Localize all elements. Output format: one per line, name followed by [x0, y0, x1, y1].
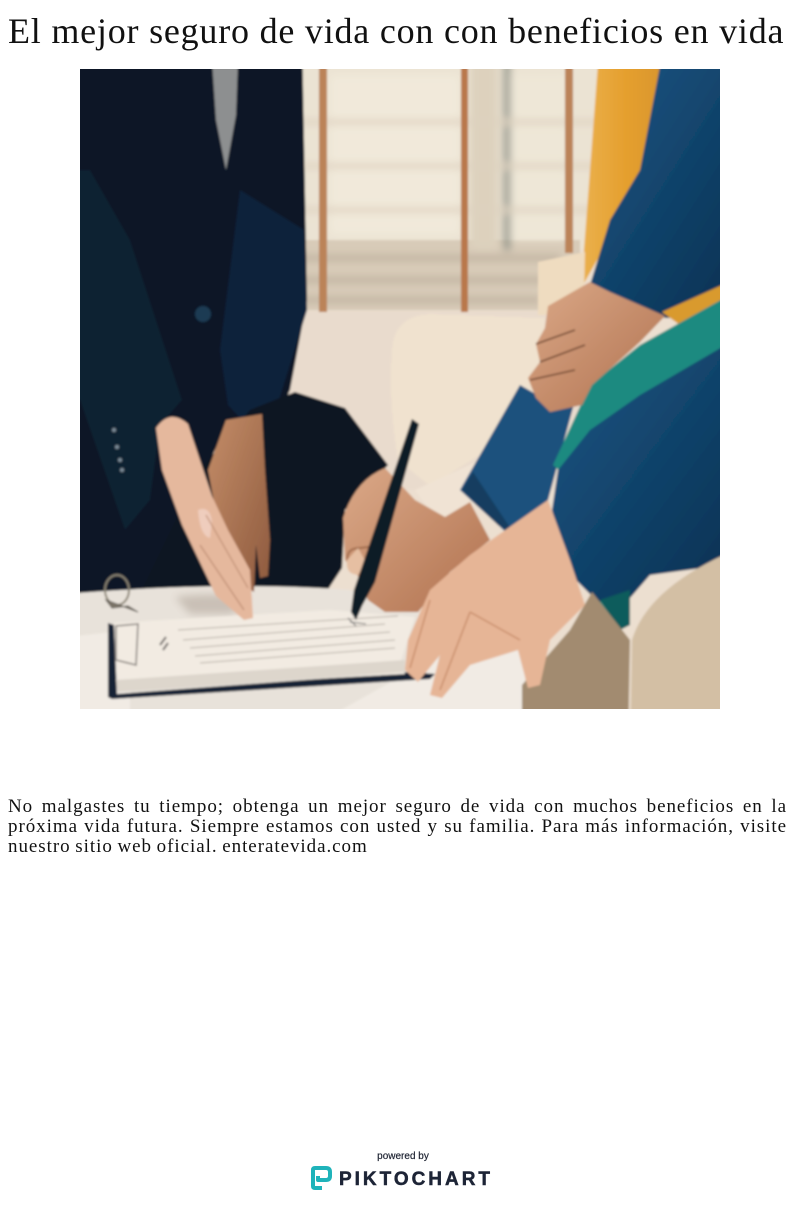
trousers of the client — [522, 540, 760, 750]
foreground hand — [405, 500, 585, 698]
body text: nuestro sitio web oficial. enteratevida.com — [8, 836, 368, 857]
blue sweater arm — [460, 50, 760, 536]
blind cords — [319, 60, 573, 312]
piktochart logo — [311, 1151, 490, 1190]
photo: signing an insurance document — [80, 69, 720, 709]
suit jacket — [40, 30, 307, 600]
body text: No malgastes tu tiempo; obtenga un mejor seguro de vida con muchos beneficios en la — [8, 796, 787, 817]
title: El mejor seguro de vida con con beneficios en vida — [8, 11, 784, 51]
icon: piktochart mark — [313, 1168, 330, 1188]
curtain — [583, 50, 665, 285]
window blinds — [302, 60, 600, 300]
clipboard and document — [105, 575, 435, 699]
body text — [8, 796, 787, 857]
table — [40, 586, 525, 750]
body text: próxima vida futura. Siempre estamos con usted y su familia. Para más información, visite — [8, 816, 787, 837]
writing hand with pen — [343, 419, 490, 620]
hands of the advisor — [156, 414, 270, 620]
right blue sleeve — [552, 325, 760, 630]
hand on arm — [528, 282, 665, 412]
green garment — [553, 278, 760, 630]
powered by caption: powered by — [377, 1151, 429, 1162]
sofa — [391, 252, 585, 530]
trousers — [140, 392, 388, 594]
room background — [40, 30, 760, 750]
wordmark: PIKTOCHART — [339, 1169, 490, 1190]
